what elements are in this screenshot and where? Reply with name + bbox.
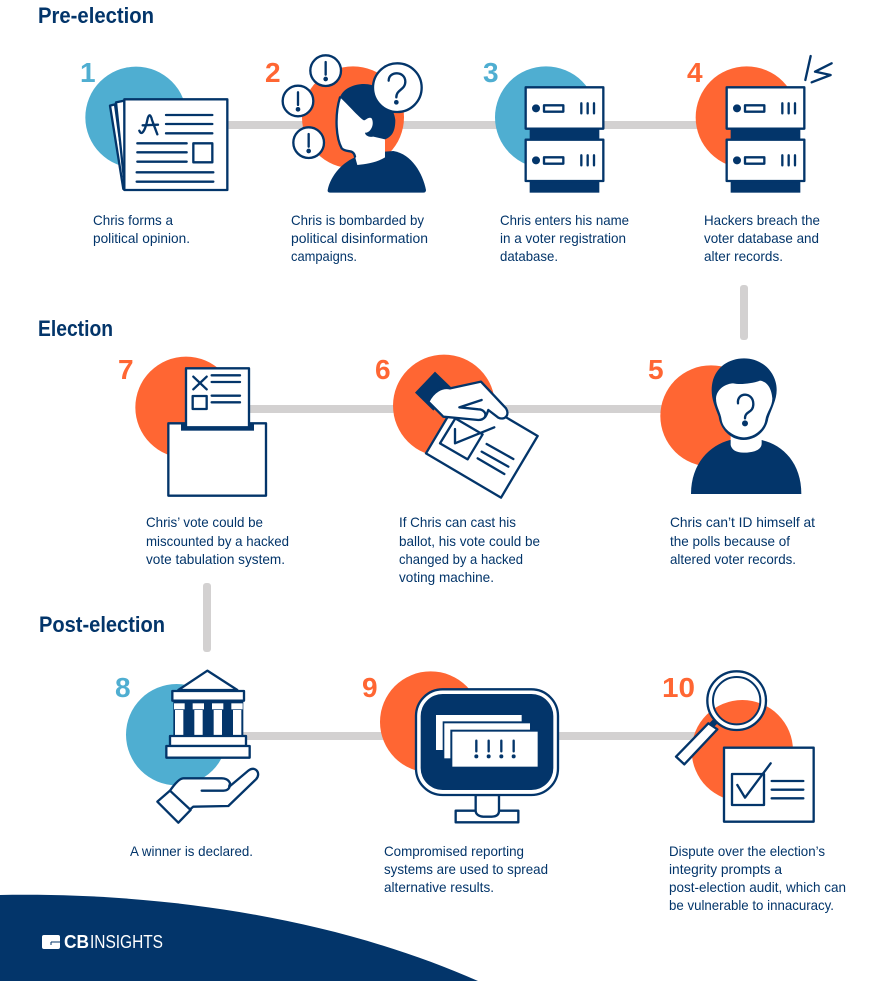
panel: step 9 (362, 671, 558, 895)
heading: Post-election: Post-election (39, 612, 165, 637)
text: step 9 (384, 843, 548, 895)
text: step 1: political opinion. (93, 230, 190, 246)
icon: newspaper (85, 67, 227, 190)
number 6: 6 (375, 354, 391, 385)
text: step 6: ballot, his vote could be (399, 533, 540, 549)
connector: post-election row (240, 732, 700, 740)
icon: magnifier over audit document (676, 671, 814, 822)
text: step 7: Chris’ vote could be (146, 514, 263, 530)
text: step 2: campaigns. (291, 248, 357, 264)
text: step 3 (500, 212, 629, 264)
text: step 6: voting machine. (399, 569, 494, 585)
text: step 4: alter records. (704, 248, 783, 264)
icon: CB Insights logo mark (42, 935, 60, 949)
icon: breached database servers (696, 56, 832, 193)
text: step 4: voter database and (704, 230, 819, 246)
number 8: 8 (115, 672, 131, 703)
text: step 7: vote tabulation system. (146, 551, 285, 567)
connector arrow: step 7 to step 8 (203, 583, 211, 652)
text: step 3: in a voter registration (500, 230, 626, 246)
number 9: 9 (362, 672, 378, 703)
text: step 4: Hackers breach the (704, 212, 820, 228)
panel: step 2 (265, 55, 428, 264)
panel: step 5 (648, 354, 815, 567)
icon: database servers (495, 66, 603, 193)
icon: ballot box (135, 357, 266, 496)
connector: pre-election row (180, 121, 705, 129)
panel: step 1 (80, 57, 227, 246)
text: step 2: political disinformation (291, 230, 428, 246)
text: step 7 (146, 514, 289, 567)
text: step 7: miscounted by a hacked (146, 533, 289, 549)
text: step 10: be vulnerable to innacuracy. (669, 897, 834, 913)
text: step 4 (704, 212, 820, 264)
number 10: 10 (662, 672, 695, 703)
text: step 6: changed by a hacked (399, 551, 523, 567)
panel: step 10 (662, 671, 846, 913)
panel: step 7 (118, 354, 289, 567)
connector arrow: step 4 to step 5 (740, 285, 748, 340)
text: step 6: If Chris can cast his (399, 514, 516, 530)
panel: step 3 (483, 57, 629, 264)
icon: person bombarded by alerts (283, 55, 426, 193)
text: step 8: A winner is declared. (130, 843, 253, 859)
logo wordmark: INSIGHTS (90, 932, 163, 952)
text: step 10: integrity prompts a (669, 861, 782, 877)
icon: hand casting ballot (393, 355, 538, 498)
text: step 3: Chris enters his name (500, 212, 629, 228)
text: step 3: database. (500, 248, 558, 264)
text: step 9: systems are used to spread (384, 861, 548, 877)
logo wordmark: CB (64, 932, 89, 952)
number 2: 2 (265, 57, 281, 88)
text: step 1: Chris forms a (93, 212, 173, 228)
text: step 5: Chris can’t ID himself at (670, 514, 815, 530)
number 4: 4 (687, 57, 703, 88)
text: step 1 (93, 212, 190, 246)
text: step 5 (670, 514, 815, 567)
connector: election row (245, 405, 670, 413)
number 3: 3 (483, 57, 499, 88)
text: step 5: the polls because of (670, 533, 790, 549)
text: step 5: altered voter records. (670, 551, 796, 567)
number 5: 5 (648, 354, 664, 385)
text: step 10 (669, 843, 846, 913)
text: step 9: Compromised reporting (384, 843, 524, 859)
heading: Pre-election: Pre-election (38, 3, 154, 28)
text: step 6 (399, 514, 540, 585)
heading: Election: Election (38, 316, 113, 341)
panel: step 6 (375, 354, 540, 585)
text: step 2 (291, 212, 428, 264)
text: step 10: post-election audit, which can (669, 879, 846, 895)
panel: step 4 (687, 56, 832, 264)
icon: faceless person (660, 358, 801, 494)
icon: monitor with false results (380, 671, 558, 822)
footer band with logo (0, 895, 478, 981)
text: step 10: Dispute over the election’s (669, 843, 825, 859)
icon: hand holding government building (126, 671, 258, 823)
text: step 2: Chris is bombarded by (291, 212, 424, 228)
text: step 9: alternative results. (384, 879, 494, 895)
number 1: 1 (80, 57, 96, 88)
number 7: 7 (118, 354, 134, 385)
panel: step 8 (115, 671, 258, 859)
